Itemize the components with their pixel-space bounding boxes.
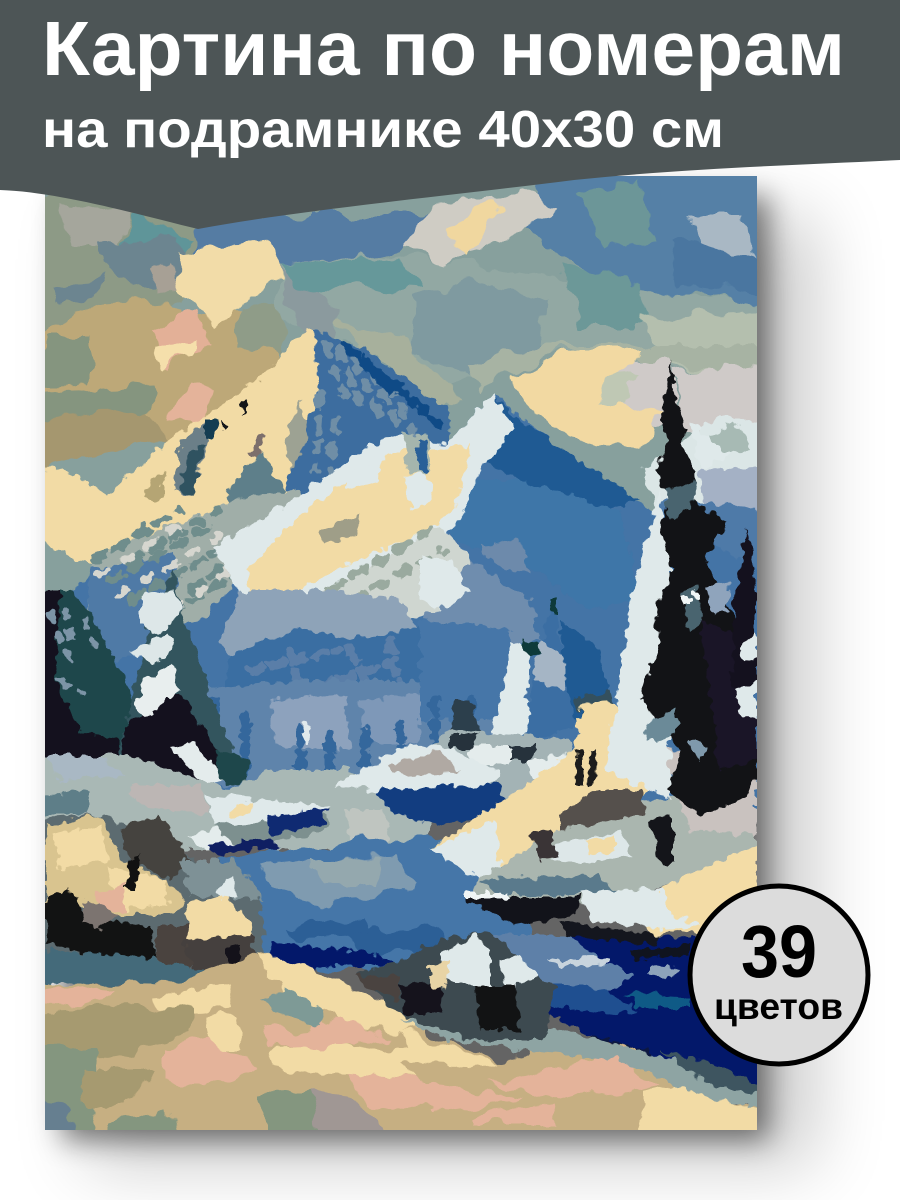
header banner [0,0,900,229]
subtitle: на подрамнике 40х30 см [42,101,724,159]
centre snowy shrub [355,932,555,1040]
badge: 39 colours [690,886,868,1064]
tall fir trees [605,360,757,815]
snow banks left and pale water [20,745,510,855]
navy river [270,932,757,1084]
ground [45,952,757,1130]
badge: 39 colours: цветов [714,986,843,1027]
left forest [45,569,251,786]
sky [45,176,757,592]
teal shoreline [260,990,780,1115]
right snowy bank [430,700,757,945]
valley haze forest [195,620,520,785]
badge: 39 colours: 39 [741,910,817,993]
mid snow trees [450,598,614,738]
far mountain [640,415,757,569]
mottled snowy rocks below small trees [430,729,572,800]
left bushes [20,815,265,990]
water [215,838,530,975]
title: Картина по номерам [42,6,845,92]
left peak cream face [20,327,450,570]
front mountain mass [72,394,757,809]
canvas shadow [62,196,815,1165]
painting: mountain landscape [45,176,757,1130]
